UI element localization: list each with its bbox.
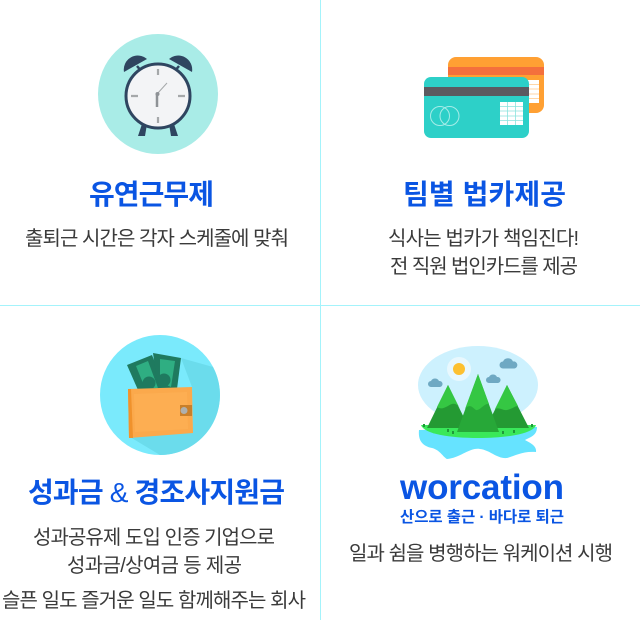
icon: credit cards <box>424 57 544 138</box>
panel: team card <box>388 57 579 278</box>
icon: wallet <box>100 335 220 455</box>
panel: worcation <box>349 346 613 565</box>
text: worcation description: 일과 쉼을 병행하는 워케이션 시행 <box>349 542 613 565</box>
panel: flexible work <box>25 34 289 250</box>
heading: worcation: worcation <box>399 468 564 507</box>
heading: bonus and support: 성과금 & 경조사지원금 <box>28 477 285 508</box>
icon: mountain island <box>418 346 538 459</box>
heading: team card: 팀별 법카제공 <box>403 179 566 210</box>
text: bonus description: 성과금/상여금 등 제공 <box>67 554 242 577</box>
text: team card description <box>388 227 579 278</box>
icon: alarm clock <box>98 34 218 154</box>
heading: flexible work: 유연근무제 <box>89 179 214 210</box>
text: team card description: 식사는 법카가 책임진다! <box>388 227 579 250</box>
text: team card description: 전 직원 법인카드를 제공 <box>390 255 578 278</box>
text: bonus description: 성과공유제 도입 인증 기업으로 <box>33 526 275 549</box>
text: flexible work description: 출퇴근 시간은 각자 스케줄에 맞춰 <box>25 227 289 250</box>
text: bonus description <box>2 526 306 612</box>
text: bonus description: 슬픈 일도 즐거운 일도 함께해주는 회사 <box>2 589 306 612</box>
panel: bonus <box>2 335 306 612</box>
subheading: mountain and sea: 산으로 출근 · 바다로 퇴근 <box>400 508 564 526</box>
